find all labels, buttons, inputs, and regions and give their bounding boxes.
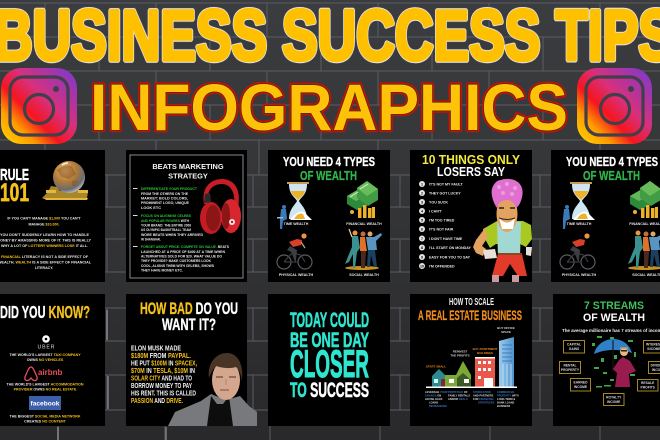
text: step descriptions: PORTFOLIO OF [448, 390, 468, 394]
panel: today could be one day closer to success [268, 294, 390, 426]
callouts: income streams: EARNED [574, 380, 588, 384]
text: beats strategy list: FOCUS ON ALIGNING CELEBS [141, 214, 192, 218]
icon: friends repeat [628, 230, 660, 270]
text: elon musk story: HIS RENT. THIS IS CALLED [131, 388, 196, 398]
text: motivational quote: TODAY COULD [290, 309, 369, 332]
heading: 7 streams of wealth: 7 STREAMS [584, 300, 644, 312]
icon: small teal house [432, 369, 446, 387]
list: ten excuses: I'M OFFENDED [429, 264, 455, 268]
text: wealth labels: FINANCIAL WEALTH [346, 222, 382, 226]
heading: how bad do you want it: HOW BAD DO YOU [140, 300, 238, 318]
callouts: income streams: CAPITAL [567, 342, 581, 346]
heading: 7 streams of wealth: OF WEALTH [583, 312, 645, 324]
logo: facebook: facebook [31, 400, 60, 408]
text: building labels [426, 326, 515, 368]
text: step descriptions [425, 390, 519, 408]
list: ten excuses: THEY GOT LUCKY [429, 192, 461, 196]
list: ten excuses: IT'S NOT MY FAULT [429, 182, 463, 186]
text: motivational quote: TO SUCCESS [290, 379, 369, 402]
text: elon musk story: HE PUT $100M IN SPACEX, [131, 359, 197, 368]
text: rule 101 body [0, 216, 92, 270]
text: rule 101 body: LITERACY. [35, 266, 53, 270]
list: ten excuses: YOU SUCK [429, 200, 448, 204]
text: building labels: BUILDINGS [477, 351, 493, 355]
icon: red headphones [200, 179, 241, 234]
icon: instagram left [1, 68, 77, 144]
heading: infographics: INFOGRAPHICS [90, 70, 568, 144]
list: ten excuses: 7 [421, 237, 423, 241]
panel: rule 101 [0, 150, 105, 282]
text: rule 101 body: WHY A LOT OF LOTTERY WINNERS LOSE IT ALL. [1, 244, 88, 248]
heading: 10 things only losers say: 10 THINGS ONLY [422, 153, 521, 167]
heading: 4 types of wealth [283, 154, 375, 183]
heading: 4 types of wealth: YOU NEED 4 TYPES [283, 154, 375, 169]
text: wealth labels: SOCIAL WEALTH [349, 273, 379, 277]
icon: globe on gold [42, 161, 88, 200]
text: step descriptions: SYNDICATION [473, 390, 491, 394]
panel: how bad do you want it [126, 294, 257, 426]
icon: money financial wealth [347, 181, 378, 218]
text: beats strategy list: FROM THE OTHERS ON THE [141, 192, 189, 196]
text: step descriptions: FAMILY RENTALS [448, 394, 470, 398]
text: rule 101 body: MANAGE $10,000. [29, 222, 59, 226]
icon: blue office tower [499, 337, 514, 387]
text: motivational quote: BE ONE DAY [290, 329, 369, 352]
text: wealth labels repeat: TIME WEALTH [567, 222, 592, 226]
text: beats strategy list: COOL, ALIGNS THEM WITH CELEBS, SHOWS [141, 264, 215, 268]
panel: did you know [0, 294, 105, 426]
callouts: income streams: PROPERTY [561, 368, 580, 372]
logo: uber: UBER [38, 344, 55, 350]
callouts: income streams: INCOME [574, 385, 588, 389]
text: beats strategy list: US OLYMPIC BASKETBALL TEAM [141, 228, 191, 232]
text: beats strategy list: PROMINENT LOGO, UNIQUE [141, 201, 190, 205]
icon: hourglass repeat [563, 182, 595, 229]
callouts: income streams: RENTAL [563, 364, 577, 368]
text: elon musk story: ELON MUSK MADE [131, 344, 181, 353]
text: beats strategy list: IN SHANGHAI. [141, 238, 161, 242]
heading: 7 streams of wealth [583, 300, 645, 324]
callouts: income streams: RESALE [641, 381, 655, 385]
heading: beats marketing strategy: STRATEGY [168, 172, 208, 180]
text: beats strategy list: YOUR BRAND: THE ENTIRE 2008 [141, 224, 191, 228]
icon: hourglass time wealth [277, 182, 312, 229]
text: wealth labels repeat: PHYSICAL WEALTH [562, 273, 597, 277]
list: ten excuses: 2 [421, 191, 423, 195]
text: step descriptions: BANK LOANS [497, 400, 515, 404]
text: beats strategy list: THEY HAVE MONEY ETC. [141, 269, 183, 273]
text: step descriptions: BUSINESS [497, 404, 511, 408]
panel: how to scale a real estate business [410, 294, 532, 426]
panel: today could be one day closer to success: CLOSER [290, 343, 369, 386]
panel: beats marketing strategy [126, 150, 247, 282]
list: ten excuses: 1 [421, 182, 423, 186]
text: building labels: START SMALL [426, 364, 446, 368]
list: ten excuses: 5 [421, 218, 423, 222]
panel: you need 4 types of wealth (repeat) [551, 150, 660, 282]
icon: red apartment building [475, 357, 495, 387]
text: beats strategy list: DIFFERENTIATE YOUR PRODUCT [141, 187, 198, 191]
list: ten excuses: 3 [421, 200, 423, 204]
text: elon musk story: $70M IN TESLA, $10M IN [131, 366, 195, 375]
heading: beats marketing strategy [152, 162, 224, 180]
text: building labels: SPACE [501, 330, 511, 334]
list: ten excuses: IT'S NOT FAIR [429, 228, 454, 232]
text: wealth labels [279, 222, 382, 277]
text: airbnb fact [7, 382, 84, 392]
heading: beats marketing strategy: BEATS MARKETING [152, 162, 224, 171]
callouts: income streams: GAINS [569, 347, 580, 351]
icon: cyclist physical wealth [277, 233, 312, 269]
icon: friends social wealth [345, 229, 382, 270]
list: ten excuses [419, 181, 472, 269]
heading: did you know: DID YOU KNOW? [0, 302, 90, 322]
text: beats strategy list: FORGET ABOUT PRICE. COMPETE ON VALUE. BEATS [141, 245, 230, 249]
heading: 4 types of wealth repeat: OF WEALTH [583, 168, 640, 183]
text: beats strategy list: AND POPULAR FIGURES WITH [141, 219, 189, 223]
text: rule 101 body: IF YOU CAN'T MANAGE $1,000 YOU CAN'T [7, 216, 81, 220]
text: building labels: REINVEST [453, 350, 467, 354]
text: step descriptions: AND/OR DEALS [448, 397, 468, 401]
text: step descriptions: AND PARTNERS [473, 394, 494, 398]
heading: infographics: INFOGRAPHICS [90, 70, 568, 144]
text: step descriptions: COMMERCIAL [497, 390, 515, 394]
text: elon musk story: BORROW MONEY TO PAY [131, 381, 192, 390]
panel: 7 streams of wealth [553, 294, 660, 426]
icon: cyclist repeat [560, 233, 595, 269]
callouts: income streams: INCOME [607, 400, 621, 404]
text: uber fact: THE WORLD'S LARGEST TAXI COMPANY [9, 353, 81, 357]
text: step descriptions: REFINANCING [429, 404, 447, 408]
heading: 10 things only losers say: LOSERS SAY [437, 165, 506, 179]
text: wealth labels: TIME WEALTH [284, 222, 309, 226]
text: elon musk story: SOLAR CITY AND HAD TO [131, 374, 192, 383]
text: rule 101 body: WEALTH. WEALTH IS A SIDE EFFECT OF FINANCIAL [0, 260, 92, 264]
text: uber fact [9, 353, 81, 362]
text: beats strategy list: ALTERNATIVES SOLD FOR $20. WHAT VALUE DO [141, 254, 222, 258]
list: ten excuses: 4 [421, 209, 423, 213]
list: ten excuses: I'M TOO TIRED [429, 218, 455, 222]
text: elon musk story [131, 344, 197, 405]
heading: how bad do you want it: WANT IT? [162, 316, 216, 334]
icon: money repeat [630, 181, 660, 218]
list: ten excuses: 6 [421, 227, 423, 231]
text: beats strategy list: WORE BEATS WHEN THEY ARRIVED [141, 233, 203, 237]
heading: how to scale: A REAL ESTATE BUSINESS [418, 308, 522, 323]
icon: cartoon man with empty pockets [473, 179, 532, 282]
text: beats strategy list: LOOK ETC [141, 206, 161, 210]
list: ten excuses: EASY FOR YOU TO SAY [429, 256, 471, 260]
list: ten excuses: I DON'T HAVE TIME [429, 237, 463, 241]
heading: 4 types of wealth: OF WEALTH [300, 168, 357, 183]
text: wealth labels: PHYSICAL WEALTH [279, 273, 314, 277]
icon: man with umbrella and money [592, 336, 636, 388]
text: uber fact: OWNS NO VEHICLES [27, 358, 64, 362]
list: ten excuses: I CAN'T [429, 210, 443, 214]
text: rule 101 body: FINANCIAL LITERACY IS NOT A SIDE EFFECT OF [1, 255, 89, 259]
panel: you need 4 types of wealth [268, 150, 390, 282]
heading: rule 101: 101 [0, 179, 29, 207]
text: facebook fact: THE BIGGEST SOCIAL MEDIA NETWORK [10, 414, 81, 418]
list: ten excuses: 9 [421, 255, 423, 259]
callouts: income streams: PROFITS [641, 386, 656, 390]
list: ten excuses: 8 [421, 246, 423, 250]
text: building labels: BUY APARTMENT [473, 347, 498, 351]
text: airbnb fact: THE WORLD'S LARGEST ACCOMMODATION [7, 382, 84, 386]
heading: rule 101: RULE [0, 167, 29, 184]
heading: infographics: INFOGRAPHICS [90, 70, 568, 144]
callouts: income streams: ROYALTY [606, 396, 622, 400]
text: motivational quote [290, 309, 369, 402]
icon: green house [445, 361, 471, 387]
text: elon musk story: PASSION AND DRIVE. [131, 396, 183, 405]
heading: how to scale [418, 297, 522, 323]
text: step descriptions: HOUSE HACK [425, 397, 443, 401]
text: building labels: BUY OFFICE [497, 326, 515, 330]
text: beats strategy list: MARKET: BOLD COLORS, [141, 196, 188, 200]
list: ten excuses: I'LL START ON MONDAY [429, 246, 472, 250]
text: elon musk story: $180M FROM PAYPAL. [131, 351, 191, 360]
icon: instagram right [577, 68, 652, 144]
logo: airbnb: airbnb [38, 368, 63, 377]
heading: 10 things only losers say [422, 153, 521, 179]
text: airbnb fact: PROVIDER OWNS NO REAL ESTATE [14, 388, 77, 392]
text: step descriptions: LOANS [429, 400, 438, 404]
callouts: income streams [560, 340, 660, 406]
text: rule 101 body: YOU DON'T SUDDENLY LEARN HOW TO HANDLE [0, 233, 90, 237]
photo: elon musk [168, 353, 257, 426]
text: step descriptions: FOR FINANCING [473, 397, 494, 401]
text: wealth labels repeat [562, 222, 660, 277]
heading: 4 types of wealth repeat [566, 154, 658, 183]
text: step descriptions: STRATEGIES [478, 400, 495, 404]
text: step descriptions: PROPERTY WITH [497, 394, 519, 398]
chart: building growth steps [426, 337, 517, 388]
list: ten excuses: 10 [420, 264, 424, 268]
text: step descriptions: LONG-TERM & [497, 397, 515, 401]
text: building labels: THE PROFITS [450, 354, 470, 358]
text: step descriptions: SAVINGS ON [425, 394, 441, 398]
text: facebook fact: CREATES NO CONTENT [24, 420, 67, 424]
heading: rule 101 [0, 167, 29, 207]
heading: how to scale: HOW TO SCALE [449, 297, 494, 308]
text: step descriptions: LEVERAGE YOUR [425, 390, 448, 394]
heading: how bad do you want it [140, 300, 238, 334]
text: beats strategy list [133, 187, 230, 273]
text: beats strategy list: THEY PROVIDE? MAKE CUSTOMERS LOOK [141, 259, 211, 263]
panel: 10 things only losers say [410, 150, 532, 282]
text: facebook fact [10, 414, 81, 424]
text: beats strategy list: LAUNCHED AT A PRICE OF $400 AT A TIME WHEN [141, 250, 225, 254]
